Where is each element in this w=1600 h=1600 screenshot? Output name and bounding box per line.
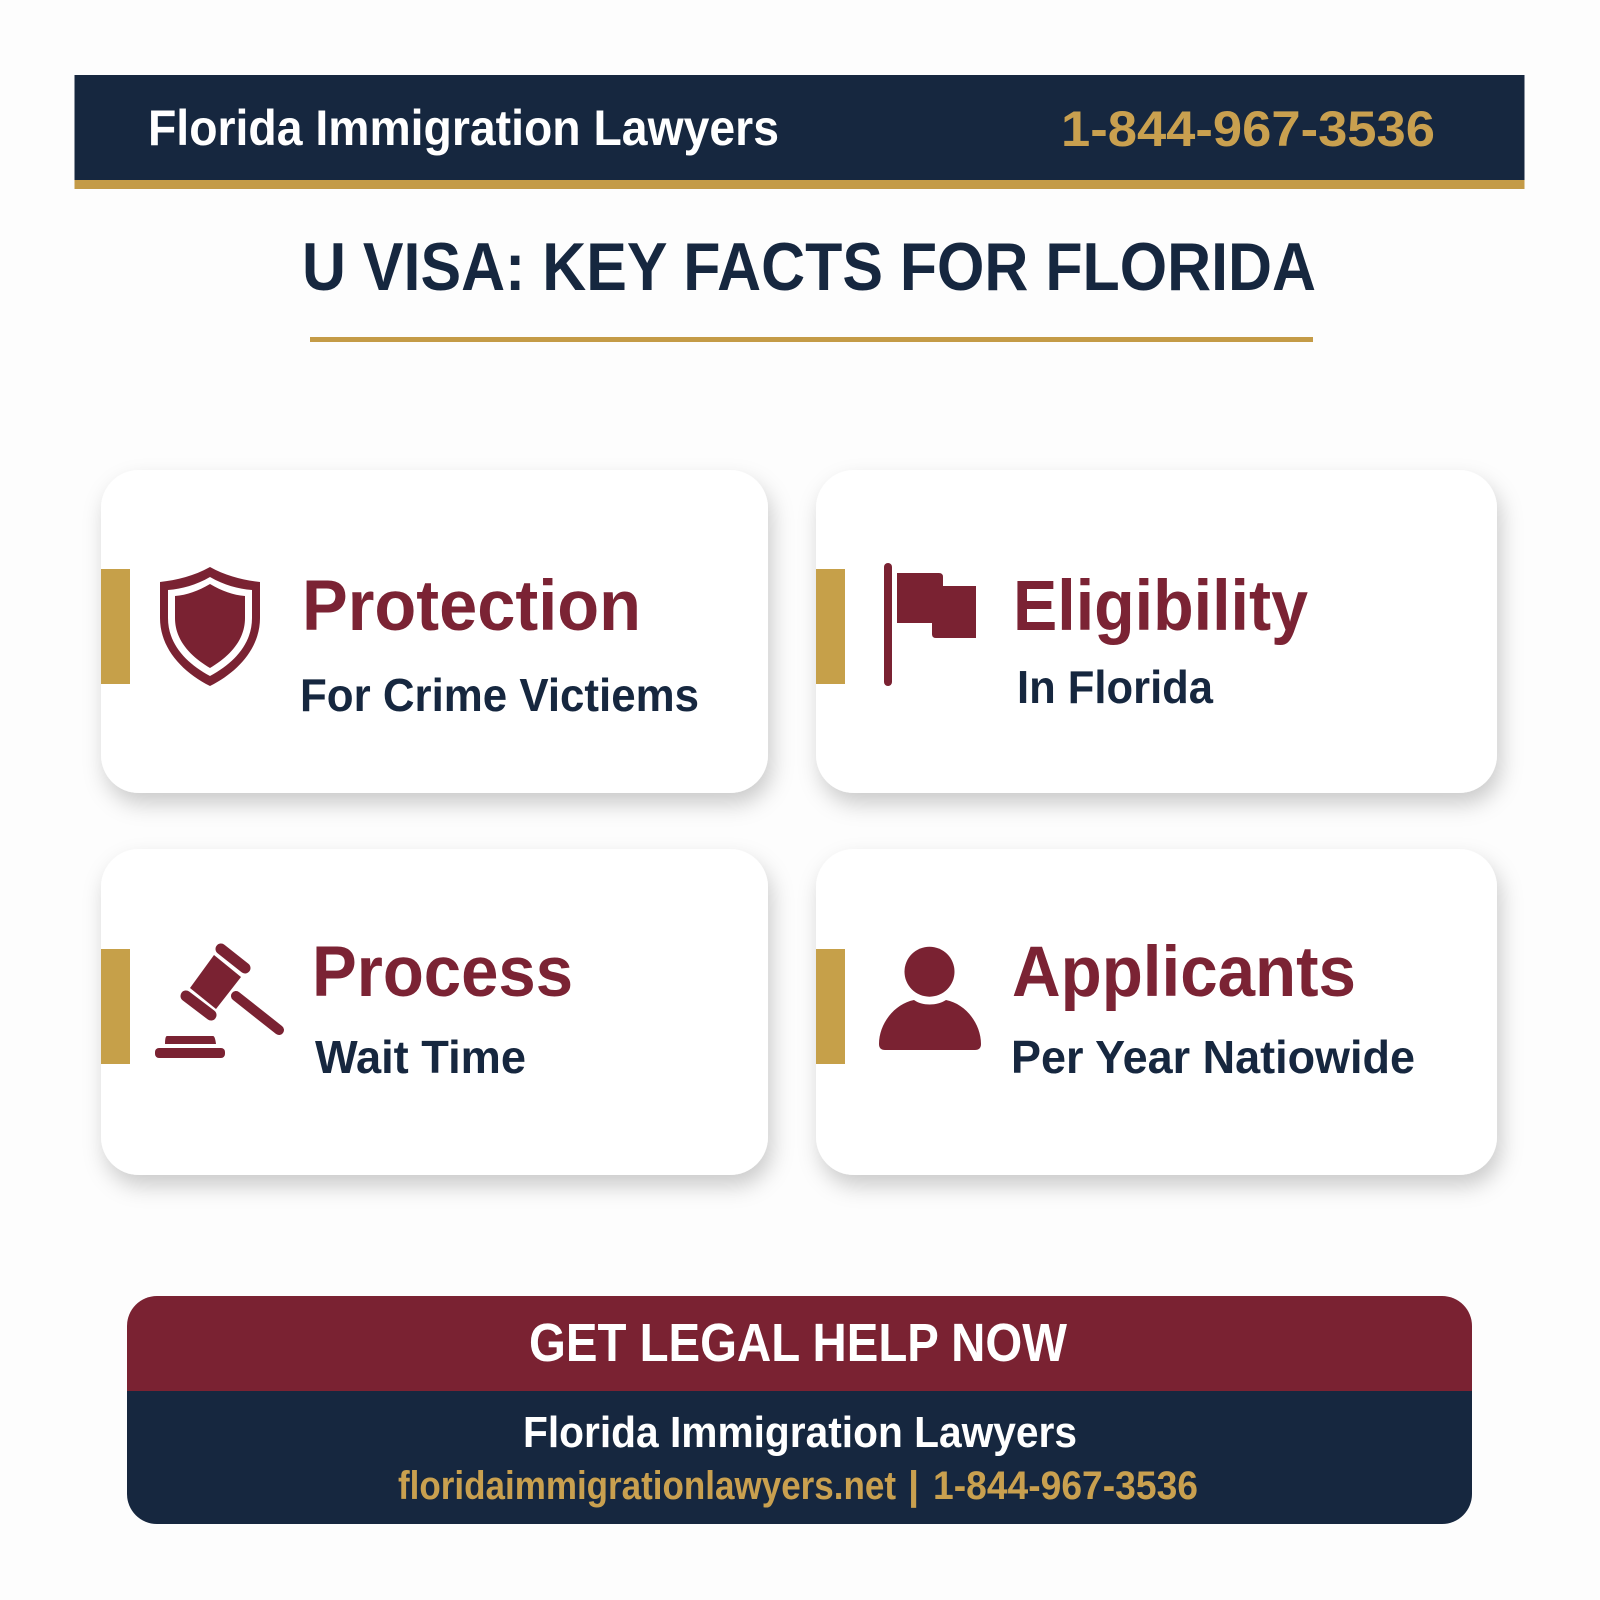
cta heading: GET LEGAL HELP NOW (529, 1313, 1067, 1373)
call to action banner (127, 1296, 1472, 1524)
panel: applicants (816, 849, 1497, 1175)
cta firm name: Florida Immigration Lawyers (523, 1408, 1077, 1457)
panel: process (101, 849, 768, 1175)
icon: shield (160, 567, 260, 686)
header bar (74, 75, 1524, 189)
cta contact line: | (908, 1464, 919, 1508)
subtext: wait time: Wait Time (315, 1031, 526, 1083)
heading: applicants: Applicants (1012, 933, 1356, 1012)
phone number: 1-844-967-3536 (1061, 101, 1435, 157)
icon: person (879, 947, 981, 1050)
subtext: for crime victims: For Crime Victiems (300, 669, 699, 721)
panel: protection (101, 470, 768, 793)
title: U VISA: KEY FACTS FOR FLORIDA (302, 229, 1316, 305)
cta contact line: floridaimmigrationlawyers.net (398, 1464, 896, 1508)
heading: process: Process (312, 933, 573, 1012)
cta contact line: 1-844-967-3536 (933, 1464, 1198, 1508)
panel: eligibility (816, 470, 1497, 793)
subtext: in florida: In Florida (1017, 661, 1213, 713)
subtext: per year nationwide: Per Year Natiowide (1011, 1031, 1415, 1083)
heading: eligibility: Eligibility (1013, 567, 1308, 646)
icon: gavel (155, 949, 279, 1058)
icon: flag (884, 563, 976, 686)
heading: protection: Protection (302, 567, 641, 646)
firm name: Florida Immigration Lawyers (148, 100, 779, 156)
